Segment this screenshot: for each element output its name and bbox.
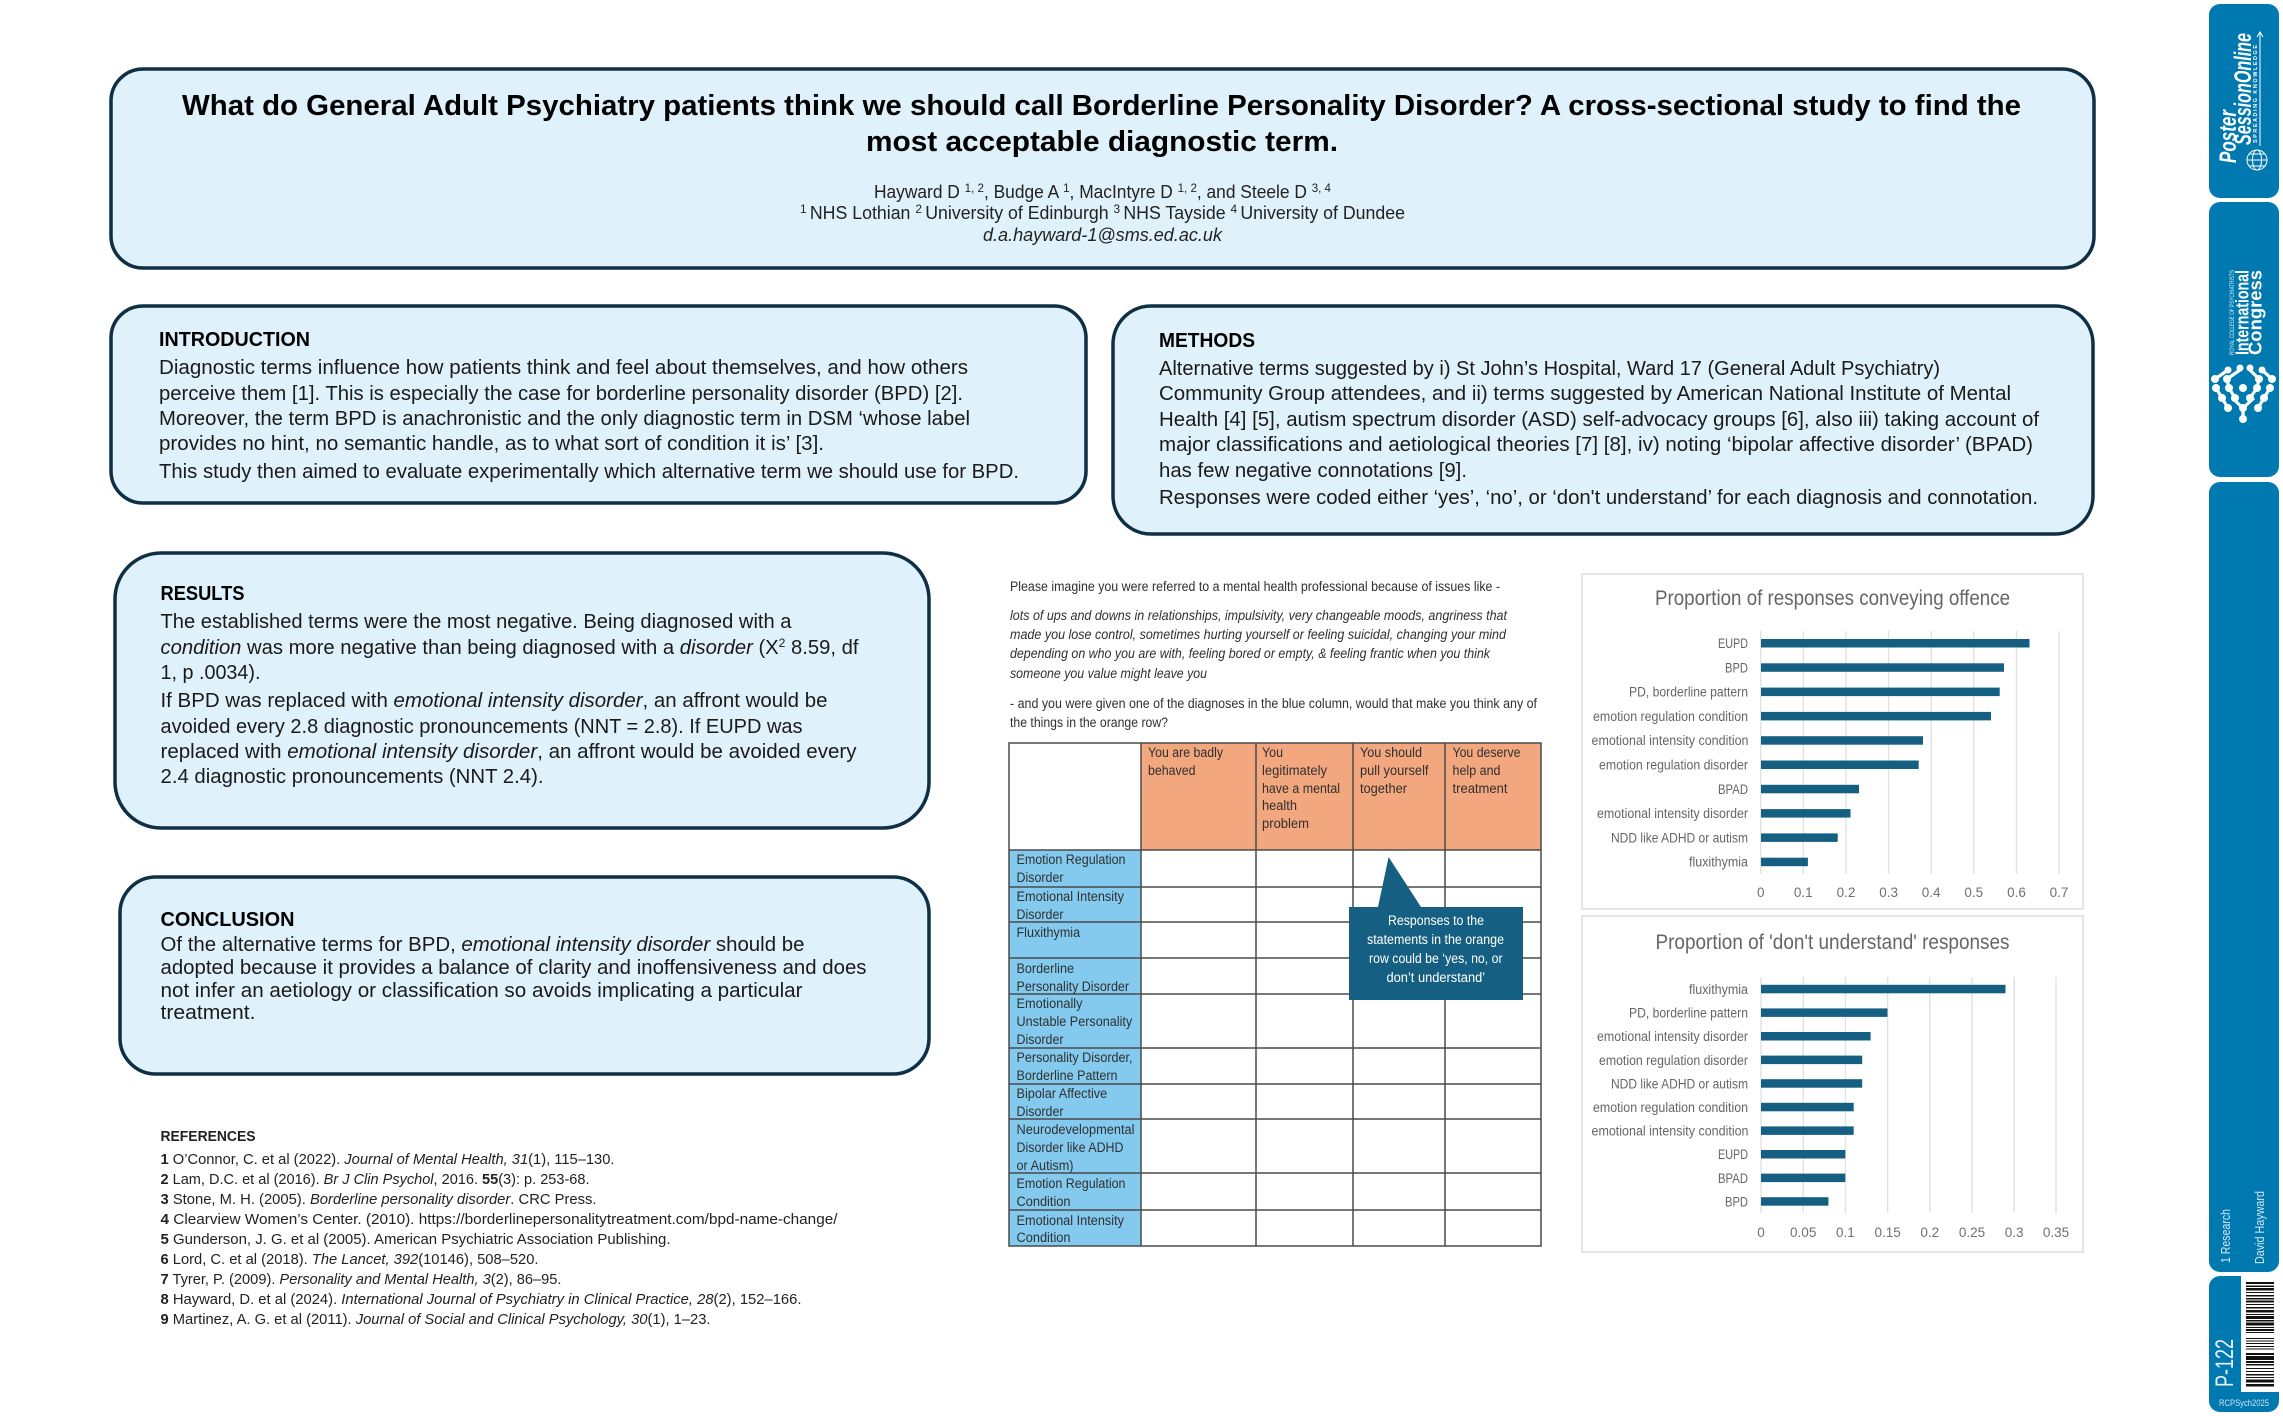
table row labels: Emotional Intensity (1016, 889, 1124, 904)
category labels: PD, borderline pattern (1629, 685, 1748, 700)
sidebar tile: category and author: David Hayward (2252, 1191, 2267, 1264)
references: 2 Lam, D.C. et al (2016). Br J Clin Psychol, 2016. 55(3): p. 253-68. (160, 1172, 590, 1188)
table row labels: Emotional Intensity (1016, 1213, 1124, 1228)
category labels: emotion regulation disorder (1599, 1053, 1748, 1068)
survey vignette text: - and you were given one of the diagnoses in the blue column, would that make you think any of (1010, 696, 1537, 711)
bar chart: proportion of responses conveying offence (1582, 574, 2083, 909)
callout: response options: statements in the orange (1367, 932, 1504, 947)
category labels: BPD (1725, 1194, 1748, 1209)
table column headers: together (1360, 781, 1407, 796)
value axis: 0.2 (1837, 885, 1855, 900)
table column headers: behaved (1148, 763, 1196, 778)
bar chart: proportion of don't understand responses (1582, 916, 2083, 1252)
bars (1761, 639, 2030, 866)
text: methods body: has few negative connotations [9]. (1159, 460, 1467, 482)
table column headers: help and (1452, 763, 1500, 778)
text: introduction body: Diagnostic terms influence how patients think and feel about themselves, and how others (159, 357, 968, 379)
survey vignette text: someone you value might leave you (1010, 666, 1207, 681)
chart title: Proportion of 'don't understand' responses (1656, 931, 2010, 954)
authors and affiliations: 1, 2 (1178, 181, 1197, 195)
references: 7 Tyrer, P. (2009). Personality and Mental Health, 3(2), 86–95. (160, 1272, 562, 1288)
callout: response options: don’t understand’ (1386, 970, 1485, 985)
authors and affiliations: , MacIntyre D (1070, 182, 1178, 202)
title (182, 90, 2021, 158)
table row labels: Disorder (1016, 1104, 1064, 1119)
table row labels: Disorder (1016, 1032, 1064, 1047)
value axis: 0.15 (1874, 1225, 1901, 1240)
table row labels: Emotionally (1016, 996, 1083, 1011)
sidebar tile: Poster Session Online logo (2209, 4, 2279, 198)
table row labels: Condition (1016, 1194, 1070, 1209)
table row labels: Borderline Pattern (1016, 1068, 1118, 1083)
authors and affiliations: , and Steele D (1197, 182, 1312, 202)
category labels (1592, 636, 1748, 870)
category labels: emotion regulation disorder (1599, 758, 1748, 772)
text: methods body: Responses were coded either ‘yes’, ‘no’, or ‘don't understand’ for each diagnosis and connotation. (1159, 487, 2038, 509)
category labels: emotional intensity condition (1592, 733, 1748, 748)
text: introduction body (159, 357, 1019, 483)
value axis: 0.35 (2043, 1225, 2069, 1240)
value axis: 0.1 (1836, 1225, 1855, 1240)
text: introduction body: provides no hint, no semantic handle, as to what sort of condition it is’ [3]. (159, 433, 824, 455)
text: conclusion body: not infer an aetiology or classification so avoids implicating a particular (160, 980, 803, 1002)
category labels: NDD like ADHD or autism (1611, 830, 1748, 845)
table row labels: Personality Disorder (1016, 979, 1129, 994)
sidebar tile: RCPsych International Congress logo (2209, 202, 2279, 477)
text: methods body: Health [4] [5], autism spectrum disorder (ASD) self-advocacy groups [6], also iii) taking account of (1159, 409, 2039, 431)
heading: methods: METHODS (1159, 330, 1255, 352)
table column headers: You deserve (1452, 745, 1520, 760)
category labels: emotion regulation condition (1593, 1100, 1748, 1115)
category labels: EUPD (1718, 1147, 1748, 1162)
sidebar tile: Poster Session Online logo: SPREADING KNOWLEDGE (2253, 45, 2259, 143)
value axis: 0 (1757, 1225, 1765, 1240)
table row labels: Personality Disorder, (1016, 1050, 1132, 1065)
table column headers: health (1262, 798, 1297, 813)
table row labels: Emotion Regulation (1016, 852, 1126, 867)
callout: response options: row could be ‘yes, no, or (1369, 951, 1503, 966)
references: 3 Stone, M. H. (2005). Borderline personality disorder . CRC Press. (160, 1192, 596, 1208)
text: results body: 8.59, df (785, 637, 859, 659)
text: results body: 1, p .0034). (160, 662, 260, 684)
text: results body: 2.4 diagnostic pronouncements (NNT 2.4). (160, 766, 544, 788)
sidebar tile: Poster Session Online logo: Poster (2215, 109, 2242, 163)
sidebar tile: RCPsych International Congress logo: ROYAL COLLEGE OF PSYCHIATRISTS (2230, 270, 2236, 355)
survey table (1009, 743, 1541, 1246)
table row labels: Disorder (1016, 907, 1064, 922)
sidebar tile: poster number and barcode: RCPSych2025 (2219, 1398, 2269, 1409)
table column headers: legitimately (1262, 763, 1327, 778)
authors and affiliations: , Budge A (984, 182, 1063, 202)
category labels: fluxithymia (1689, 855, 1748, 870)
survey vignette text: the things in the orange row? (1010, 715, 1168, 730)
survey vignette text: made you lose control, sometimes hurting yourself or feeling suicidal, changing your mind (1010, 627, 1506, 642)
table column headers: pull yourself (1360, 763, 1429, 778)
text: results body: avoided every 2.8 diagnostic pronouncements (NNT = 2.8). If EUPD was (160, 716, 802, 738)
value axis: 0 (1757, 885, 1764, 900)
sidebar tile: RCPsych International Congress logo: Congress (2246, 270, 2266, 355)
category labels: NDD like ADHD or autism (1611, 1076, 1748, 1091)
category labels: BPAD (1718, 782, 1748, 797)
heading: results: RESULTS (160, 583, 244, 605)
barcode (2246, 1282, 2274, 1386)
text: results body: The established terms were the most negative. Being diagnosed with a (160, 611, 792, 633)
sidebar tile: category and author: 1 Research (2218, 1209, 2233, 1263)
category labels: emotional intensity disorder (1597, 1029, 1748, 1044)
references: 9 Martinez, A. G. et al (2011). Journal of Social and Clinical Psychology, 30 (1), 1–23. (160, 1312, 710, 1328)
table row labels (1016, 852, 1134, 1245)
text: results body: condition was more negative than being diagnosed with a disorder (X (160, 637, 778, 659)
references: REFERENCES (160, 1129, 256, 1145)
text: conclusion body (160, 934, 867, 1024)
survey vignette text: Please imagine you were referred to a mental health professional because of issues like - (1010, 579, 1500, 594)
text: introduction body: Moreover, the term BPD is anachronistic and the only diagnostic term in DSM ‘whose label (159, 408, 970, 430)
references (160, 1129, 839, 1328)
references: 6 Lord, C. et al (2018). The Lancet, 392(10146), 508–520. (160, 1252, 538, 1268)
authors and affiliations: University of Edinburgh (925, 203, 1114, 223)
value axis: 0.1 (1794, 885, 1813, 900)
panel: title block (111, 69, 2094, 268)
authors and affiliations: 1, 2 (965, 181, 984, 195)
category labels: emotional intensity disorder (1597, 806, 1748, 821)
icon: globe and arrow (2247, 32, 2267, 170)
text: results body: 2 (779, 636, 786, 650)
text: results body: If BPD was replaced with emotional intensity disorder , an affront would be (160, 690, 828, 712)
authors and affiliations: 1 (1063, 181, 1070, 195)
text: results body: replaced with emotional intensity disorder , an affront would be avoided every (160, 741, 856, 763)
title: most acceptable diagnostic term. (866, 126, 1338, 158)
table row labels: Neurodevelopmental (1016, 1122, 1134, 1137)
text: methods body: Alternative terms suggested by i) St John’s Hospital, Ward 17 (General Adult Psychiatry) (1159, 358, 1940, 380)
table column headers: have a mental (1262, 781, 1340, 796)
table row labels: Disorder like ADHD (1016, 1140, 1124, 1155)
authors and affiliations: University of Dundee (1240, 203, 1405, 223)
references: 1 O’Connor, C. et al (2022). Journal of Mental Health, 31(1), 115–130. (160, 1152, 615, 1168)
value axis: 0.5 (1964, 885, 1983, 900)
value axis: 0.25 (1959, 1225, 1985, 1240)
table column headers: problem (1262, 816, 1309, 831)
title: What do General Adult Psychiatry patients think we should call Borderline Personality Disorder? A cross-sectional study to find the (182, 90, 2021, 122)
authors and affiliations: 2 (915, 202, 925, 216)
table row labels: Emotion Regulation (1016, 1176, 1126, 1191)
category labels: EUPD (1718, 636, 1748, 651)
authors and affiliations: NHS Lothian (810, 203, 915, 223)
value axis: 0.3 (1879, 885, 1898, 900)
category labels: PD, borderline pattern (1629, 1006, 1748, 1021)
text: conclusion body: Of the alternative terms for BPD, emotional intensity disorder should be (160, 934, 805, 956)
category labels (1592, 982, 1748, 1209)
authors and affiliations: 1 (800, 202, 810, 216)
authors and affiliations: 3 (1114, 202, 1123, 216)
authors and affiliations: NHS Tayside (1123, 203, 1230, 223)
bars (1761, 985, 2006, 1206)
table row labels: Condition (1016, 1230, 1070, 1245)
sidebar tile: poster number and barcode: P-122 (2211, 1339, 2239, 1387)
text: conclusion body: adopted because it provides a balance of clarity and inoffensiveness and does (160, 957, 867, 979)
survey vignette text (1010, 579, 1537, 730)
value axis (1757, 885, 2068, 900)
references: 4 Clearview Women’s Center. (2010). https://borderlinepersonalitytreatment.com/bpd-name-change/ (160, 1212, 839, 1228)
table column headers: You should (1360, 745, 1422, 760)
authors and affiliations (800, 181, 1405, 245)
references: 8 Hayward, D. et al (2024). International Journal of Psychiatry in Clinical Practice, 28 (2), 152–166. (160, 1292, 802, 1308)
table column headers: You are badly (1148, 745, 1223, 760)
authors and affiliations: 3, 4 (1312, 181, 1331, 195)
survey vignette text: lots of ups and downs in relationships, impulsivity, very changeable moods, angriness that (1010, 608, 1508, 623)
text: methods body: major classifications and aetiological theories [7] [8], iv) noting ‘bipolar affective disorder’ (BPAD) (1159, 434, 2033, 456)
table row labels: Bipolar Affective (1016, 1086, 1107, 1101)
authors and affiliations: 4 (1230, 202, 1240, 216)
table column headers: treatment (1452, 781, 1508, 796)
value axis: 0.2 (1920, 1225, 1939, 1240)
text: introduction body: perceive them [1]. This is especially the case for borderline personality disorder (BPD) [2]. (159, 383, 963, 405)
value axis: 0.7 (2050, 885, 2068, 900)
survey vignette text: depending on who you are with, feeling bored or empty, & feeling frantic when you think (1010, 646, 1491, 661)
heading: conclusion: CONCLUSION (160, 909, 294, 931)
table column headers: You (1262, 745, 1283, 760)
text: methods body (1159, 358, 2039, 509)
table row labels: Disorder (1016, 870, 1064, 885)
table row labels: or Autism) (1016, 1158, 1074, 1173)
panel: conclusion (120, 877, 929, 1074)
table row labels: Borderline (1016, 961, 1074, 976)
panel: results (115, 553, 929, 828)
value axis (1757, 1225, 2069, 1240)
panel: methods (1113, 306, 2093, 534)
category labels: BPAD (1718, 1171, 1748, 1186)
icon: neuron tree (2211, 364, 2276, 423)
category labels: emotion regulation condition (1593, 709, 1748, 724)
references: 5 Gunderson, J. G. et al (2005). American Psychiatric Association Publishing. (160, 1232, 670, 1248)
table row labels: Unstable Personality (1016, 1014, 1132, 1029)
table column headers (1148, 745, 1520, 831)
panel: introduction (111, 306, 1086, 503)
text: methods body: Community Group attendees, and ii) terms suggested by American National Institute of Mental (1159, 383, 2011, 405)
value axis: 0.6 (2007, 885, 2026, 900)
callout: response options (1349, 857, 1523, 1000)
value axis: 0.4 (1922, 885, 1941, 900)
authors and affiliations: Hayward D (874, 182, 963, 202)
category labels: emotional intensity condition (1592, 1124, 1748, 1139)
heading: introduction: INTRODUCTION (159, 329, 310, 351)
value axis: 0.3 (2005, 1225, 2024, 1240)
callout: response options: Responses to the (1388, 913, 1484, 928)
authors and affiliations: d.a.hayward-1@sms.ed.ac.uk (983, 225, 1223, 245)
sidebar tile: poster number and barcode (2209, 1276, 2279, 1412)
value axis: 0.05 (1790, 1225, 1816, 1240)
sidebar tile: category and author (2209, 482, 2279, 1272)
table row labels: Fluxithymia (1016, 925, 1081, 940)
category labels: fluxithymia (1689, 982, 1748, 997)
text: introduction body: This study then aimed to evaluate experimentally which alternative term we should use for BPD. (159, 461, 1019, 483)
text: conclusion body: treatment. (160, 1002, 256, 1024)
category labels: BPD (1725, 660, 1748, 675)
text: results body (160, 611, 859, 788)
chart title: Proportion of responses conveying offence (1655, 587, 2010, 610)
sidebar tile: RCPsych International Congress logo: International (2232, 270, 2252, 355)
